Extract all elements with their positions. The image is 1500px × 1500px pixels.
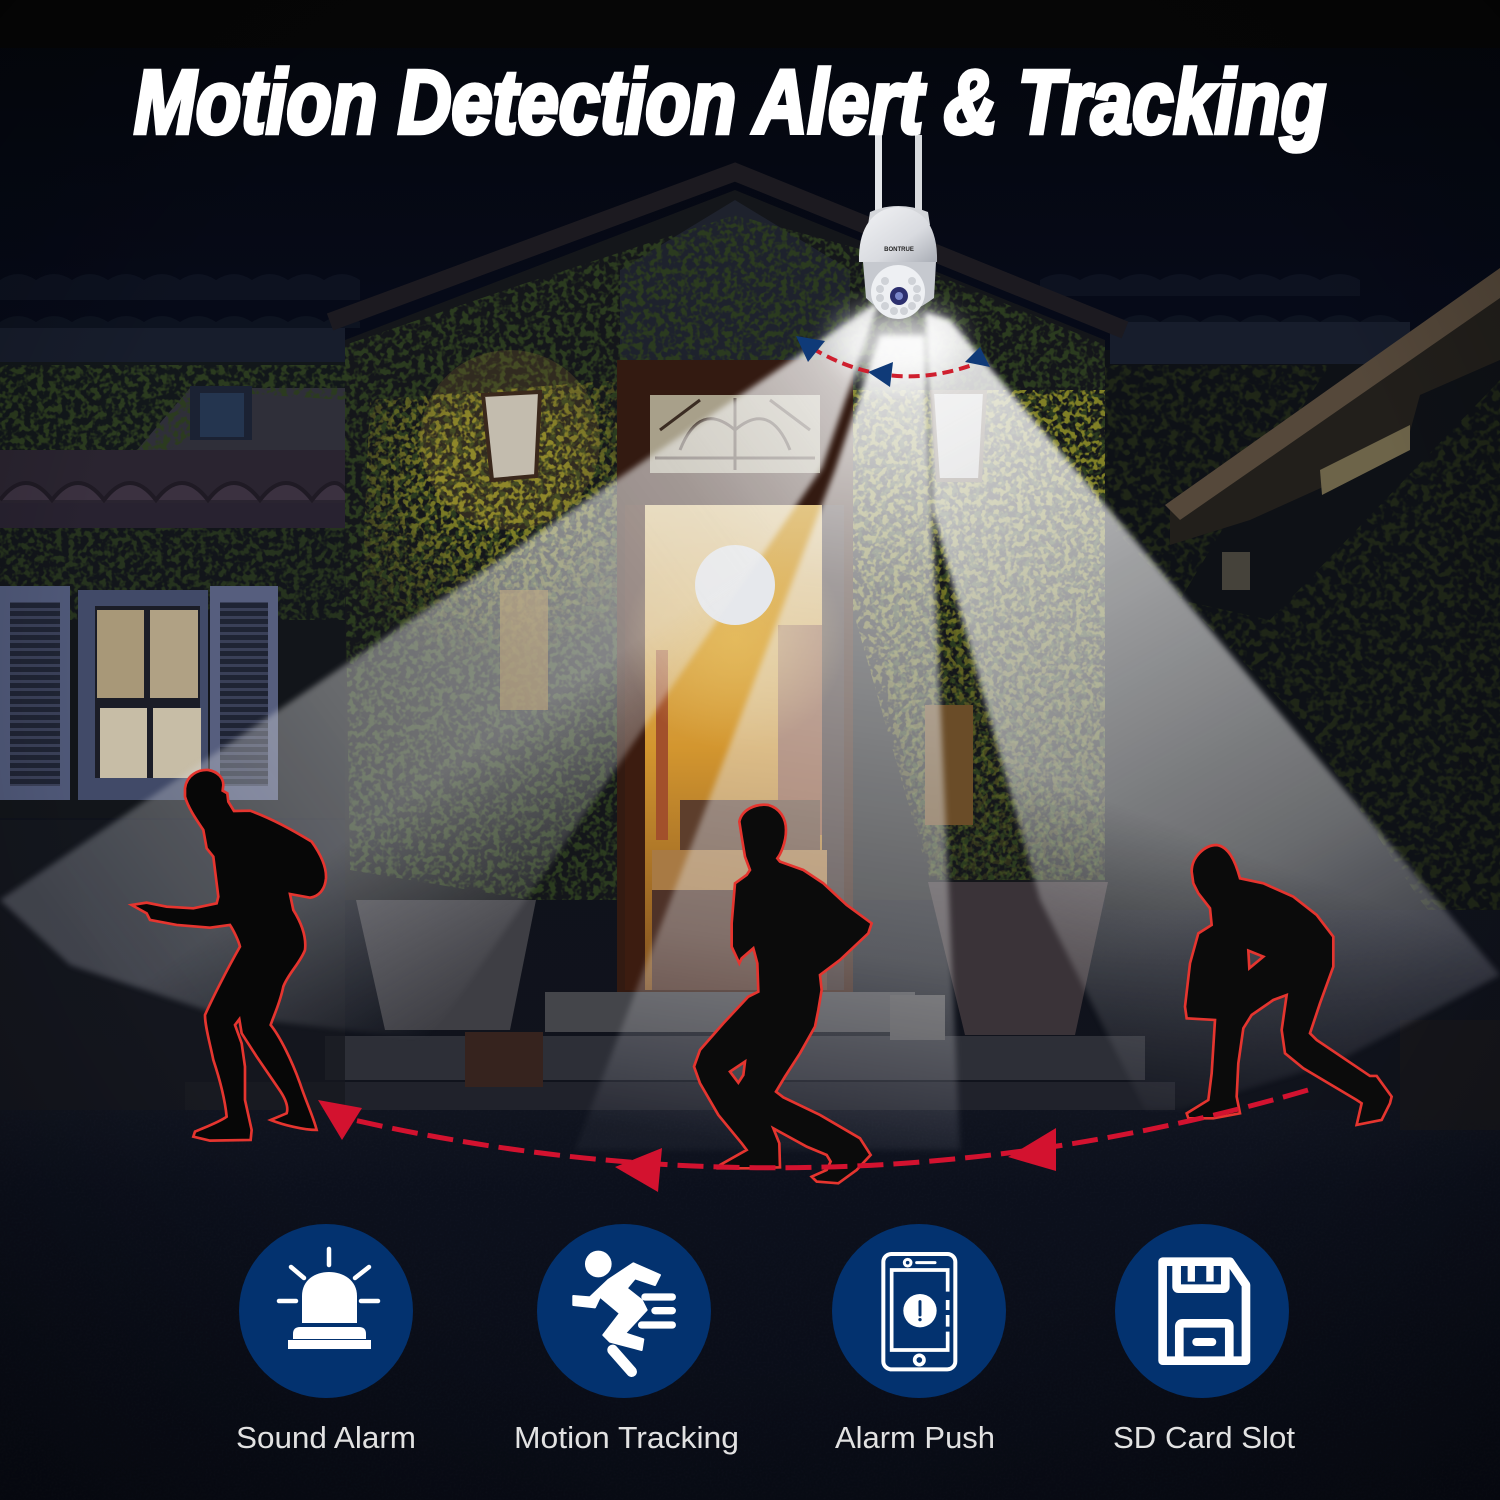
left wall lantern xyxy=(420,350,600,530)
light beams from camera xyxy=(0,300,1500,1150)
label: sound alarm: Sound Alarm xyxy=(236,1420,416,1455)
gable roof xyxy=(330,172,1125,330)
camera rotation arrows xyxy=(796,336,990,387)
left wing of house xyxy=(0,274,360,620)
camera: BONTRUE xyxy=(884,247,914,253)
feature: sound alarm xyxy=(236,1224,416,1455)
silhouette: right intruder xyxy=(1185,845,1392,1125)
icon: sound alarm xyxy=(239,1224,413,1398)
entrance steps xyxy=(185,992,1175,1112)
silhouette: left intruder xyxy=(132,770,326,1141)
feature: sd card slot xyxy=(1113,1224,1295,1455)
camera xyxy=(859,135,937,319)
tracking path arrows xyxy=(318,1090,1308,1192)
planters xyxy=(356,882,1108,1035)
icon: alarm push xyxy=(832,1224,1006,1398)
right wall lantern xyxy=(932,392,985,480)
label: motion tracking: Motion Tracking xyxy=(514,1420,739,1455)
icon: sd card slot xyxy=(1115,1224,1289,1398)
feature: motion tracking xyxy=(514,1224,739,1455)
left window with shutters xyxy=(0,586,278,800)
icon: motion tracking xyxy=(537,1224,711,1398)
entrance door xyxy=(617,360,853,1000)
silhouette: centre intruder xyxy=(694,805,872,1183)
feature: alarm push xyxy=(832,1224,1006,1455)
label: alarm push: Alarm Push xyxy=(835,1420,995,1455)
ground xyxy=(0,1110,1500,1500)
right wing and eave xyxy=(1040,268,1500,910)
gable wall and ivy xyxy=(340,190,1120,900)
label: sd card slot: SD Card Slot xyxy=(1113,1420,1295,1455)
